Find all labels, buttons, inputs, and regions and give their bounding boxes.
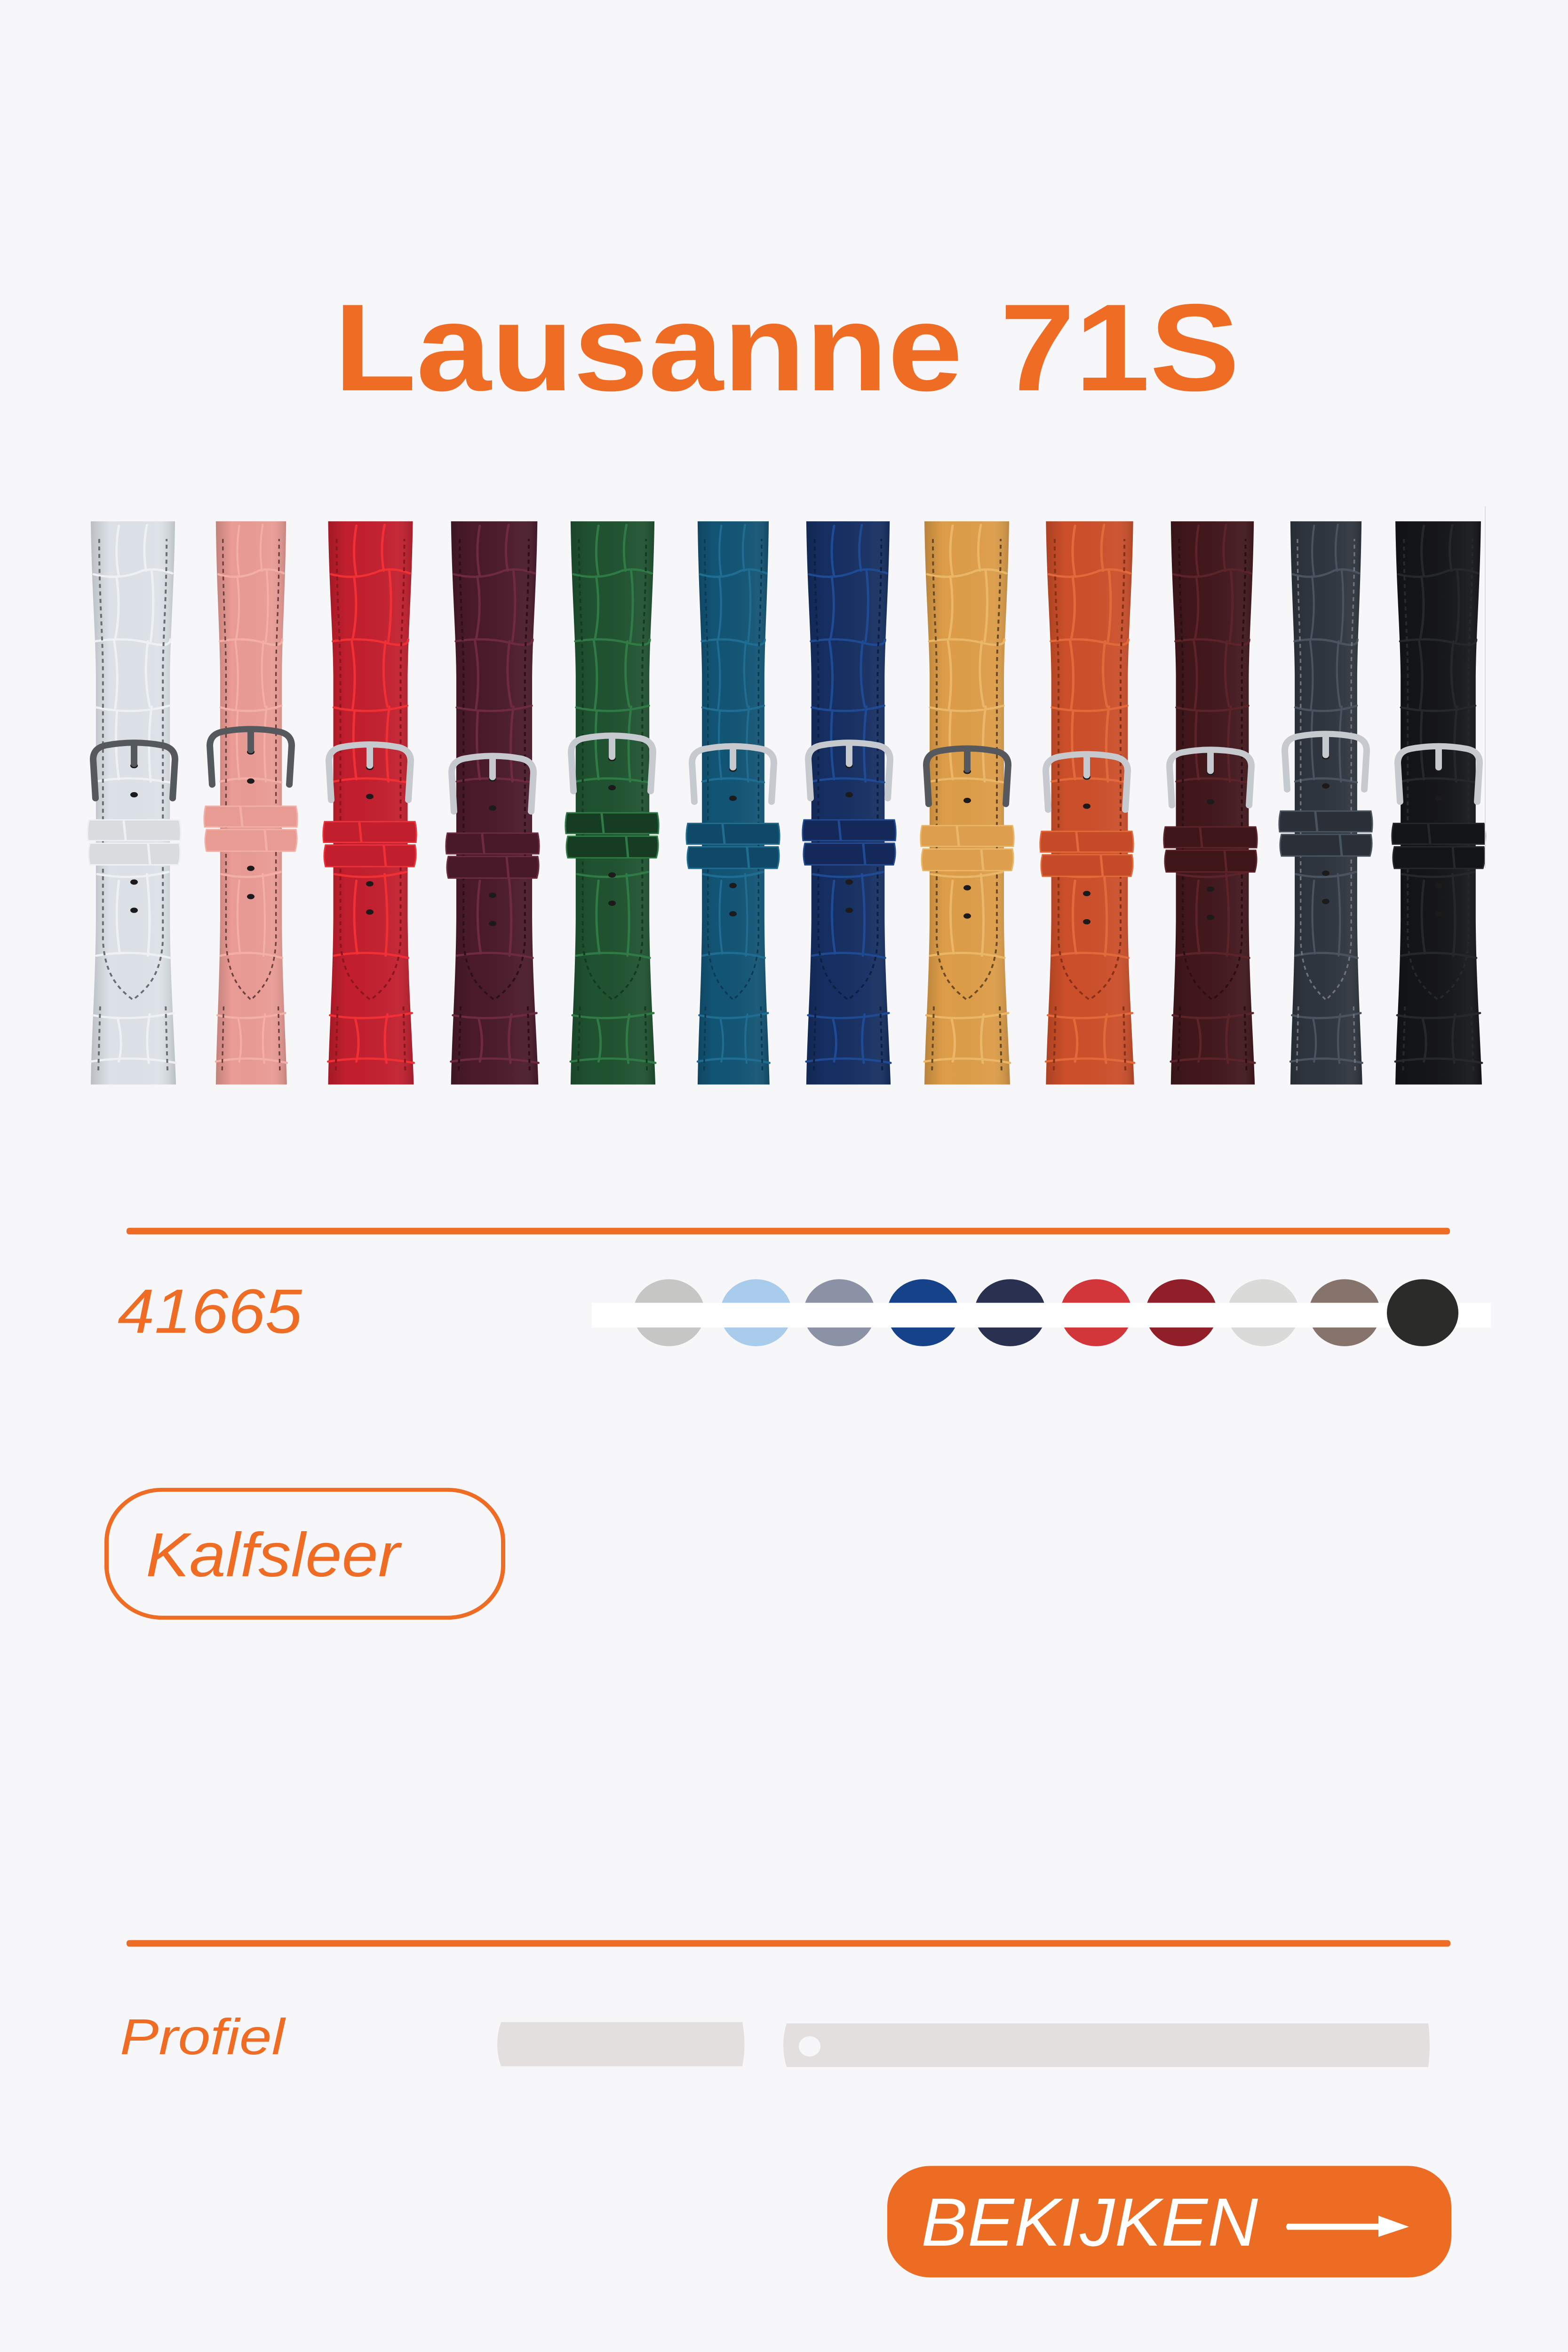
divider line bottom (127, 1940, 1450, 1947)
colour swatches (592, 1279, 1491, 1346)
strap: slate (1279, 521, 1372, 1084)
strap: black (1392, 521, 1485, 1084)
button: BEKIJKEN (921, 2184, 1258, 2260)
strap: white (88, 521, 181, 1084)
strap: plum (446, 521, 539, 1084)
material tag: Kalfsleer (146, 1520, 403, 1589)
strap: orange red (1040, 521, 1134, 1084)
arrow (1286, 2216, 1409, 2237)
button (887, 2166, 1451, 2278)
article number: 41665 (118, 1276, 302, 1346)
divider line top (127, 1228, 1450, 1234)
material tag (106, 1490, 503, 1618)
strap: pink (204, 521, 297, 1084)
profile diagram (497, 2022, 1430, 2067)
watch strap gallery (88, 521, 1485, 1084)
title: Lausanne 71S (334, 278, 1240, 417)
profile label: Profiel (120, 2008, 287, 2065)
strap: dark brown (1164, 521, 1257, 1084)
strap: green (565, 521, 659, 1084)
strap: navy (803, 521, 896, 1084)
strap: teal (686, 521, 780, 1084)
strap: red (323, 521, 416, 1084)
strap: tan (921, 521, 1014, 1084)
